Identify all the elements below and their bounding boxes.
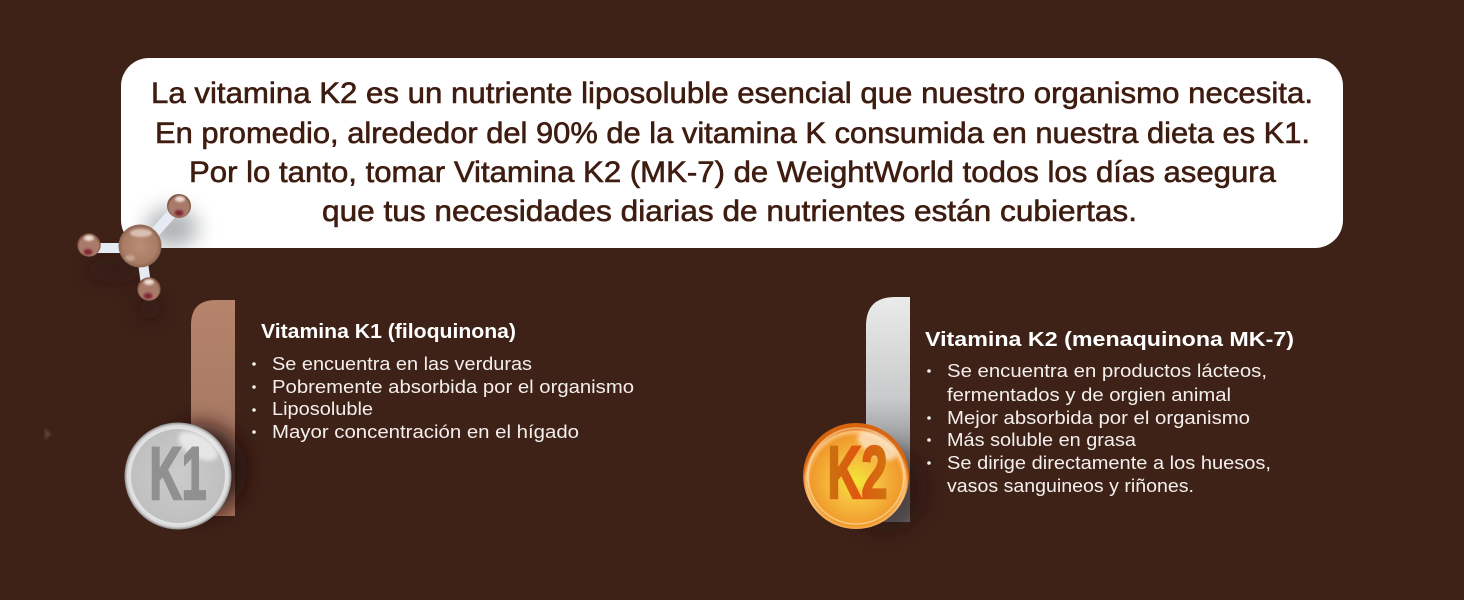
panel: introduction	[121, 58, 1343, 248]
text block: introduction: En promedio, alrededor del 90% de la vitamina K consumida en nuestra dieta es K1.	[155, 117, 1310, 150]
list: K1 traits: Pobremente absorbida por el organismo	[272, 376, 634, 397]
list: K2 traits: Más soluble en grasa	[947, 429, 1137, 450]
icon: K2 coin: K2	[828, 431, 888, 514]
text block: introduction: Por lo tanto, tomar Vitamina K2 (MK-7) de WeightWorld todos los días asegura	[189, 156, 1277, 189]
icon: K1 coin: K1	[150, 432, 206, 515]
coin shadow	[843, 448, 927, 532]
list: K2 traits: Mejor absorbida por el organismo	[947, 407, 1250, 428]
list: K2 traits: vasos sanguineos y riñones.	[947, 475, 1194, 496]
list: K2 traits: Se encuentra en productos lácteos,	[947, 360, 1267, 381]
bar: K1	[191, 300, 235, 516]
list: K1 traits: Se encuentra en las verduras	[272, 353, 532, 374]
coin shadow	[154, 424, 246, 516]
list: K2 traits: Se dirige directamente a los huesos,	[947, 452, 1271, 473]
list: K2 traits	[927, 360, 1271, 496]
faint decorative mark	[45, 428, 51, 440]
list: K1 traits: Mayor concentración en el hígado	[272, 421, 579, 442]
heading: K1: Vitamina K1 (filoquinona)	[261, 320, 516, 343]
atom: top	[167, 194, 191, 218]
panel: vitamina K1	[124, 300, 634, 530]
bar: K2	[866, 297, 910, 522]
atom: bottom	[137, 277, 161, 301]
icon: molecule	[77, 194, 198, 320]
text block: introduction: La vitamina K2 es un nutriente liposoluble esencial que nuestro organismo necesita.	[151, 77, 1313, 110]
text block: introduction	[151, 77, 1313, 228]
list: K2 traits: fermentados y de orgien animal	[947, 384, 1231, 405]
list: K1 traits: Liposoluble	[272, 398, 373, 419]
icon: K1 coin	[124, 422, 232, 530]
list: K1 traits	[252, 353, 634, 442]
icon: K2 coin	[803, 423, 909, 529]
panel: vitamina K2	[803, 297, 1294, 532]
heading: K2: Vitamina K2 (menaquinona MK-7)	[925, 328, 1294, 351]
atom: left	[77, 233, 101, 257]
text block: introduction: que tus necesidades diarias de nutrientes están cubiertas.	[322, 195, 1137, 228]
